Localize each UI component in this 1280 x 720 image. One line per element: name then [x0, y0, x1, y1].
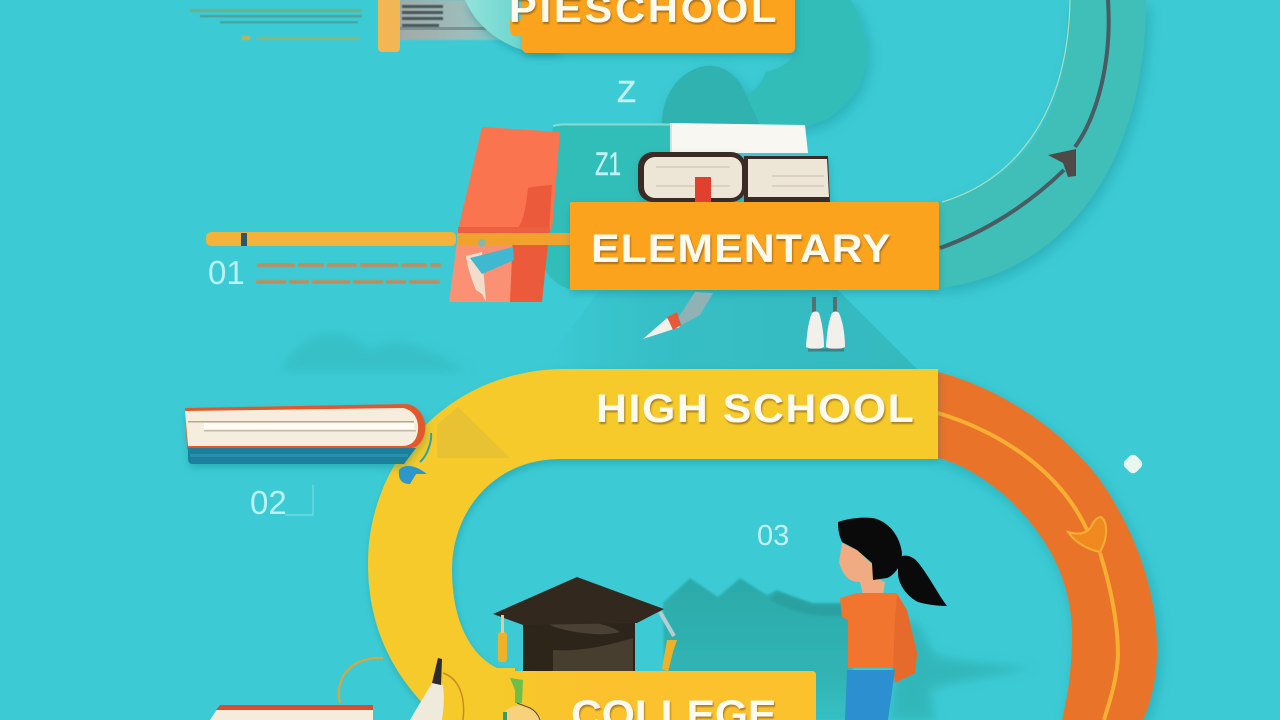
icon: open book: [638, 152, 830, 210]
number: 02: [250, 484, 313, 521]
label: preschool: [509, 0, 795, 53]
mountains behind student: [663, 578, 855, 720]
board top highlight: [553, 124, 672, 126]
label: elementary: [570, 202, 939, 290]
icon: bottom book: [210, 705, 373, 720]
pale inner line on arc: [942, 0, 1070, 202]
shirt: [840, 593, 917, 683]
cord on bottom book: [339, 658, 383, 703]
number: 03: 03: [757, 520, 789, 552]
arrow on arc: [940, 0, 1109, 248]
icon: pen nib: [410, 658, 464, 720]
trousers: [845, 670, 895, 720]
hair: [838, 518, 902, 580]
number: z1 on board: Z1: [595, 146, 621, 182]
board behind elementary: [540, 125, 672, 290]
orange arc band: [938, 372, 1157, 720]
top teal S-curve band: [662, 0, 867, 127]
text lines under rule: [256, 265, 441, 282]
mountain silhouette middle: [540, 290, 917, 369]
faint hills left: [280, 333, 470, 372]
icon: calculator stand: [378, 0, 503, 52]
number: 02: 02: [250, 484, 287, 521]
neck and face: [839, 543, 885, 595]
label: college: [497, 671, 816, 720]
icon: two pens: [806, 297, 845, 350]
orange rule with marker: [206, 232, 456, 246]
icon: blue clip: [399, 433, 431, 484]
pale teal blob behind preschool: [465, 0, 560, 52]
right teal arc band: [938, 0, 1146, 288]
book left: [185, 404, 425, 464]
student figure: [838, 518, 947, 720]
white dot: [1122, 453, 1144, 475]
top-left text lines: [190, 9, 362, 40]
icon: small plant: [503, 678, 541, 720]
road shaded fold: [437, 407, 510, 458]
icon: top book: [671, 123, 808, 153]
icon: small brush: [643, 292, 713, 339]
yellow strip over notebook: [457, 233, 570, 245]
orange notebook: [449, 127, 570, 302]
dark hump of S-curve: [662, 66, 760, 125]
shadow right of student: [890, 620, 1035, 720]
number: 2: Z: [617, 74, 636, 109]
arrow on orange arc: [938, 413, 1118, 720]
ponytail: [898, 556, 947, 606]
shadow streak on mountains: [770, 592, 850, 617]
yellow road: [368, 369, 938, 720]
number: 01: 01: [208, 254, 245, 291]
label: elementary: ELEMENTARY: [591, 226, 891, 271]
icon: graduation cap: [493, 577, 677, 672]
label: high school: HIGH SCHOOL: [596, 386, 914, 431]
